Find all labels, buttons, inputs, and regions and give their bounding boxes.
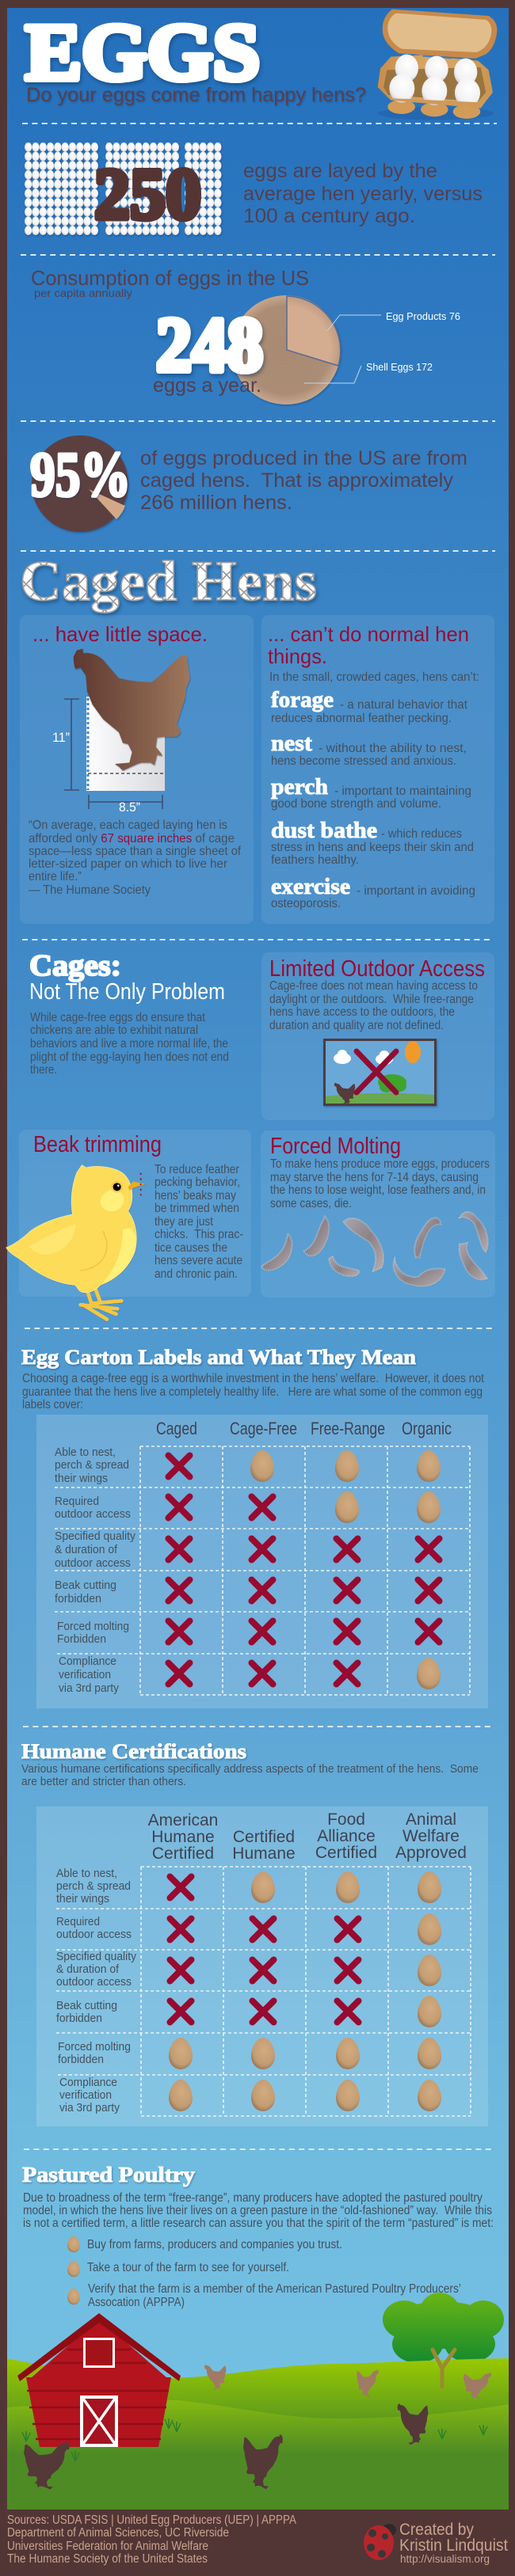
column headers: Welfare	[402, 1827, 460, 1845]
hens: foreground	[24, 2403, 429, 2490]
row labels: Able to nest,	[56, 1867, 117, 1880]
barn	[17, 2313, 181, 2447]
behavior: exercise: - important in avoiding	[357, 884, 475, 898]
column headers: Alliance	[317, 1827, 376, 1845]
quote: space—less space than a single sheet of	[29, 845, 242, 858]
row labels: Specified quality	[55, 1529, 135, 1543]
row labels: Compliance	[59, 2076, 117, 2089]
behavior: dust bathe: dust bathe	[271, 819, 377, 843]
row labels: outdoor access	[56, 1975, 132, 1989]
footer: sources: Department of Animal Sciences, UC Riverside	[7, 2526, 229, 2540]
section: Cages not the only problem: there.	[30, 1063, 57, 1077]
panel: forced molting: the hens to lose weight, lose feathers and, in	[270, 1184, 486, 1197]
row labels: Forced molting	[57, 1620, 129, 1633]
icon: crossed out outdoor scene	[325, 1040, 436, 1105]
panel: beak trimming	[19, 1130, 251, 1297]
row labels: perch & spread	[55, 1458, 129, 1472]
row labels: forbidden	[58, 2053, 104, 2066]
footer: sources: The Humane Society of the United States	[7, 2552, 208, 2566]
consumption heading: per capita annually	[34, 287, 132, 299]
column headers: Approved	[395, 1844, 467, 1862]
panel: limited outdoor access: hens have access to the outdoors, the	[269, 1005, 455, 1019]
panel: limited outdoor access: Cage-free does not mean having access to	[269, 979, 478, 993]
footer: sources: Sources: USDA FSIS | United Egg Producers (UEP) | APPPA	[7, 2513, 297, 2527]
behavior: forage: - a natural behavior that	[340, 698, 468, 712]
quote: letter-sized paper on which to live her	[29, 857, 228, 871]
marks: eggs and crosses	[169, 1871, 441, 2111]
intro paragraph	[21, 1762, 479, 1788]
letter paper	[86, 697, 165, 791]
scene: farm pasture	[7, 2293, 509, 2510]
heading: Caged Hens: Caged Hens	[20, 549, 317, 613]
panel heading: things.	[268, 644, 327, 668]
panel heading	[268, 622, 469, 668]
behavior: perch: good bone strength and volume.	[271, 797, 441, 811]
barn door	[82, 2397, 116, 2445]
panel: forced molting: To make hens produce more eggs, producers	[270, 1157, 490, 1171]
credit	[399, 2521, 508, 2565]
panel: beak trimming: chicks. This prac-	[154, 1228, 243, 1241]
leader: shell eggs	[304, 366, 361, 383]
icon: falling feathers	[261, 1212, 488, 1286]
250 description	[243, 160, 483, 227]
pie chart: consumption	[231, 295, 381, 405]
panel: beak trimming: be trimmed when	[154, 1202, 239, 1215]
panel: beak trimming: Beak trimming	[33, 1132, 162, 1157]
section: Cages not the only problem: While cage-free eggs do ensure that	[30, 1011, 206, 1024]
pie: 95 percent	[32, 435, 128, 532]
panel: beak trimming: pecking behavior,	[154, 1176, 240, 1189]
section: Cages not the only problem: behaviors and live a more normal life, the	[30, 1037, 228, 1051]
title: EGGS: EGGS	[25, 8, 260, 97]
stat: 250 eggs a year	[25, 142, 483, 235]
row labels	[56, 1867, 136, 2114]
dimension: 8.5 inch: 8.5”	[119, 800, 140, 815]
panel: beak trimming: and chronic pain.	[154, 1267, 238, 1281]
intro paragraph	[22, 1372, 485, 1411]
250 description: eggs are layed by the	[243, 160, 437, 182]
panel: beak trimming: hens severe acute	[154, 1254, 242, 1267]
row labels: Specified quality	[56, 1950, 136, 1963]
column headers: Cage-Free	[230, 1419, 297, 1438]
panel heading: ... have little space.	[32, 622, 208, 646]
behavior: exercise	[271, 875, 475, 910]
behavior: exercise: exercise	[271, 875, 350, 899]
dimension: 11 inch	[52, 699, 79, 790]
250 description: 100 a century ago.	[243, 205, 415, 227]
dimension: 8.5 inch	[89, 795, 162, 815]
behavior: exercise: osteoporosis.	[271, 897, 341, 910]
stat: 95 percent	[30, 435, 467, 532]
row labels: & duration of	[56, 1962, 120, 1976]
number 95%: 95%	[30, 440, 131, 510]
bullet list: Buy from farms, producers and companies you trust.	[87, 2238, 342, 2251]
row labels: Compliance	[59, 1655, 116, 1668]
behavior: nest	[271, 731, 467, 768]
column headers	[156, 1419, 452, 1438]
panel: forced molting: may starve the hens for 7-14 days, causing	[270, 1171, 479, 1184]
pie label: egg products: Egg Products 76	[386, 310, 460, 322]
barn window	[84, 2339, 114, 2367]
behavior: nest: nest	[271, 731, 313, 756]
table: egg labels	[36, 1415, 488, 1708]
row labels: Able to nest,	[55, 1446, 116, 1459]
row labels: Forbidden	[57, 1632, 106, 1646]
tree trunk	[433, 2350, 455, 2387]
section: Cages not the only problem: plight of the egg-laying hen does not end	[30, 1051, 229, 1064]
row labels: perch & spread	[56, 1879, 131, 1893]
front hill	[7, 2400, 509, 2510]
panel: limited outdoor access	[261, 952, 494, 1120]
icon: hen silhouette	[74, 648, 190, 770]
behavior: perch: perch	[271, 775, 328, 800]
row labels: outdoor access	[55, 1556, 131, 1570]
section: Cages not the only problem: Not The Only Problem	[29, 979, 225, 1005]
quote: afforded only 67 square inches of cage	[29, 832, 235, 845]
row labels: Beak cutting	[55, 1579, 116, 1592]
behavior: forage	[271, 688, 468, 725]
column headers: Certified	[315, 1844, 377, 1862]
bullet list: Take a tour of the farm to see for yourself.	[87, 2261, 289, 2274]
row labels: verification	[59, 2088, 112, 2102]
quote: — The Humane Society	[29, 883, 151, 897]
behavior: nest: hens become stressed and anxious.	[271, 754, 456, 768]
panel: limited outdoor access: Limited Outdoor Access	[269, 956, 485, 982]
panel: beak trimming: To reduce feather	[154, 1163, 239, 1176]
behavior: forage: reduces abnormal feather pecking.	[271, 712, 452, 725]
panel: limited outdoor access: daylight or the outdoors. While free-range	[269, 993, 474, 1006]
column headers: Free-Range	[311, 1419, 385, 1438]
behavior: dust bathe: stress in hens and keeps their skin and	[271, 841, 474, 854]
section: humane certifications	[21, 1740, 488, 2126]
panel: forced molting: some cases, die.	[270, 1197, 352, 1210]
intro paragraph: labels cover:	[22, 1398, 83, 1411]
heading: Humane Certifications	[21, 1740, 246, 1763]
icon: egg carton	[378, 9, 497, 120]
behavior: perch: - important to maintaining	[334, 785, 471, 798]
subtitle: Do your eggs come from happy hens?	[26, 84, 366, 106]
panel: forced molting: Forced Molting	[270, 1134, 401, 1159]
column headers: Food	[327, 1810, 365, 1829]
column headers: Organic	[402, 1419, 452, 1438]
95 percent description: 266 million hens.	[140, 492, 292, 514]
heading: Pastured Poultry	[22, 2163, 196, 2187]
behavior: nest: - without the ability to nest,	[319, 742, 467, 755]
behavior: forage: forage	[271, 688, 334, 712]
95 percent description: caged hens. That is approximately	[140, 469, 453, 492]
quote: entire life.”	[29, 870, 82, 883]
grass tufts	[22, 2418, 487, 2461]
icon: yellow chick	[6, 1165, 145, 1320]
back hill	[7, 2358, 509, 2454]
bullet list: Assocation (APPPA)	[88, 2296, 185, 2309]
behavior: dust bathe: feathers healthy.	[271, 853, 359, 867]
95 percent description: of eggs produced in the US are from	[140, 447, 467, 469]
panel: have little space	[20, 615, 254, 924]
column headers: Caged	[156, 1419, 197, 1438]
panel: beak trimming: tice causes the	[154, 1241, 227, 1255]
paragraph	[23, 2191, 494, 2230]
section: Cages not the only problem: Cages:	[29, 949, 121, 982]
section: Cages not the only problem	[29, 949, 229, 1077]
behavior: perch	[271, 775, 471, 811]
heading: Egg Carton Labels and What They Mean	[21, 1346, 417, 1369]
number 248: 248	[156, 302, 263, 388]
row labels: via 3rd party	[59, 2101, 120, 2114]
row labels: Beak cutting	[56, 1999, 117, 2012]
intro paragraph: Various humane certifications specifically address aspects of the treatment of the hens. Some	[21, 1762, 479, 1776]
intro: In the small, crowded cages, hens can’t:	[269, 671, 479, 684]
quote	[29, 819, 242, 897]
column headers	[148, 1810, 467, 1863]
row labels: forbidden	[56, 2012, 102, 2025]
quote: “On average, each caged laying hen is	[29, 819, 227, 832]
row labels	[55, 1446, 135, 1695]
dimension: 11 inch: 11”	[52, 730, 70, 745]
eggs a year: eggs a year.	[153, 374, 261, 397]
row labels: Required	[55, 1495, 99, 1508]
behavior: dust bathe: - which reduces	[381, 827, 462, 841]
icon: ladybug	[364, 2524, 396, 2560]
row labels: via 3rd party	[59, 1681, 119, 1695]
row labels: their wings	[56, 1892, 109, 1905]
row labels: Forced molting	[58, 2040, 131, 2054]
row labels: Required	[56, 1915, 100, 1928]
row labels: outdoor access	[55, 1507, 131, 1521]
row labels: forbidden	[55, 1592, 101, 1605]
egg grid	[25, 142, 222, 235]
panel: forced molting	[261, 1130, 495, 1297]
column headers: American	[148, 1811, 218, 1829]
marks: eggs and crosses	[168, 1450, 441, 1689]
table: certifications	[36, 1807, 488, 2126]
tree canopy	[383, 2293, 504, 2363]
bullet list	[67, 2236, 461, 2309]
credit: Kristin Lindquist	[399, 2536, 508, 2555]
row labels: their wings	[55, 1472, 108, 1485]
credit: http://visualism.org	[400, 2552, 490, 2565]
column headers: Animal	[406, 1810, 456, 1829]
row labels: verification	[59, 1668, 111, 1681]
row labels: & duration of	[55, 1543, 118, 1556]
panel heading: ... can’t do normal hen	[268, 622, 469, 646]
hens: distant	[204, 2365, 491, 2399]
section: pastured poultry	[22, 2163, 494, 2309]
panel: cannot do normal hen things	[261, 615, 494, 924]
bullet list: Verify that the farm is a member of the American Pastured Poultry Producers’	[88, 2282, 461, 2296]
leader: egg products	[327, 315, 381, 331]
footer: sources	[7, 2513, 297, 2566]
consumption heading: Consumption of eggs in the US	[31, 266, 309, 290]
section: Cages not the only problem: chickens are able to exhibit natural	[30, 1024, 198, 1037]
column headers: Certified	[233, 1828, 295, 1846]
column headers: Humane	[232, 1845, 296, 1863]
row labels: outdoor access	[56, 1928, 132, 1941]
intro paragraph: are better and stricter than others.	[21, 1775, 186, 1788]
95 percent description	[140, 447, 467, 514]
section: egg carton labels	[21, 1346, 488, 1708]
panel: limited outdoor access: duration and quality are not defined.	[269, 1019, 444, 1032]
credit: Created by	[399, 2521, 474, 2539]
behavior: dust bathe	[271, 819, 474, 867]
column headers: Certified	[152, 1845, 214, 1863]
pie label: shell eggs: Shell Eggs 172	[366, 361, 433, 373]
column headers: Humane	[151, 1828, 215, 1846]
panel: beak trimming: they are just	[154, 1215, 214, 1229]
panel: beak trimming: hens’ beaks may	[154, 1189, 236, 1203]
footer: sources: Universities Federation for Animal Welfare	[7, 2540, 208, 2553]
number 250: 250	[94, 154, 201, 234]
250 description: average hen yearly, versus	[243, 183, 483, 205]
